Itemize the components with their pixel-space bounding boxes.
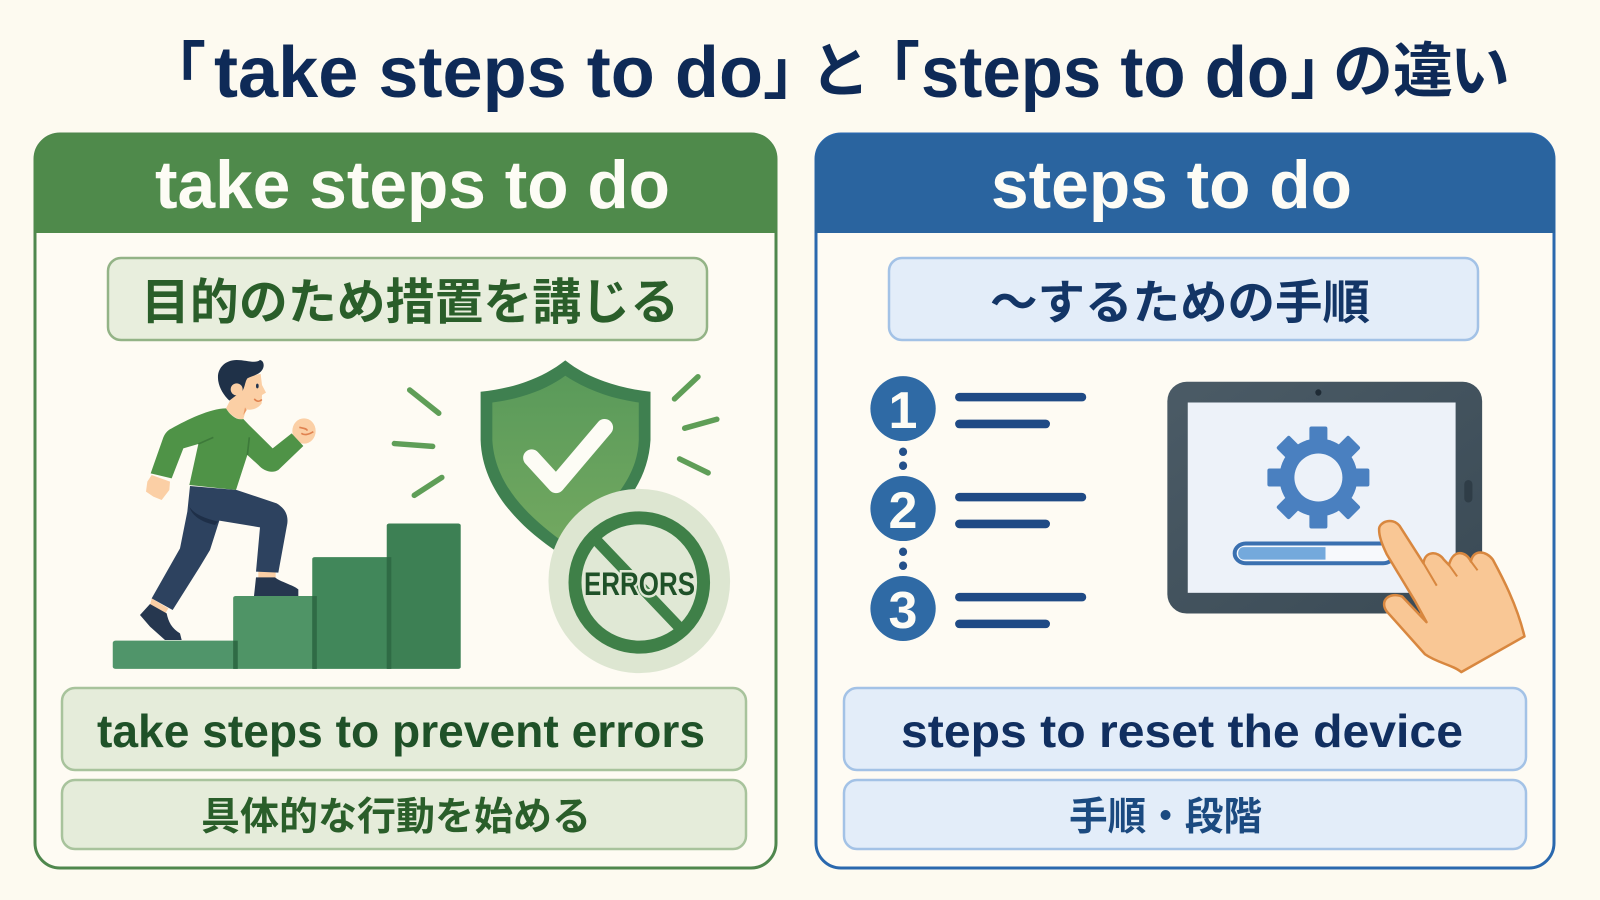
title: steps to do — [921, 33, 1289, 113]
title: 」 — [1290, 21, 1352, 111]
example phrase — [62, 688, 746, 770]
example phrase — [844, 688, 1526, 770]
no errors badge — [548, 489, 730, 673]
title: 「 — [858, 21, 920, 111]
title: 」 — [763, 21, 825, 111]
example meaning — [62, 780, 746, 849]
meaning label — [889, 258, 1478, 340]
numbered step list: 1 — [889, 382, 917, 440]
hands — [146, 418, 316, 500]
head — [218, 360, 266, 419]
panel header: take steps to do: take steps to do — [155, 147, 670, 223]
errors label: ERRORS — [584, 566, 695, 602]
numbered step list: 2 — [889, 482, 917, 540]
title: 違 — [1393, 23, 1453, 110]
panel: steps to do — [815, 134, 1555, 868]
title: い — [1450, 23, 1510, 110]
title: take steps to do — [214, 33, 763, 113]
icon: pointing hand — [1379, 521, 1524, 672]
title: の — [1333, 23, 1393, 110]
illustration: tablet with settings gear — [1167, 382, 1524, 672]
example meaning: 具体的な行動を始める — [201, 786, 591, 842]
title: と — [810, 23, 870, 110]
progress bar — [1235, 544, 1394, 563]
meaning label: ～するための手順 — [990, 264, 1370, 333]
example phrase: steps to reset the device — [901, 705, 1463, 757]
shield — [481, 360, 651, 558]
illustration: shield with check and no errors badge — [394, 360, 730, 673]
trousers and shoes — [140, 486, 298, 640]
example meaning — [844, 780, 1526, 849]
title: 「 — [144, 21, 206, 111]
illustration: stair steps — [113, 524, 461, 669]
sparkle lines — [394, 377, 717, 495]
title — [144, 21, 1510, 113]
panel header: steps to do: steps to do — [991, 147, 1352, 223]
illustration: person climbing — [140, 360, 316, 640]
icon: gear — [1267, 426, 1369, 528]
panel: take steps to do — [34, 134, 777, 868]
numbered step list: 3 — [889, 582, 917, 640]
example phrase: take steps to prevent errors — [97, 705, 705, 757]
meaning label: 目的のため措置を講じる — [141, 263, 679, 334]
example meaning: 手順・段階 — [1069, 786, 1262, 842]
sweater — [151, 408, 303, 490]
panel header: take steps to do — [34, 134, 777, 233]
panel header: steps to do — [815, 134, 1555, 233]
numbered step list — [870, 376, 1086, 641]
